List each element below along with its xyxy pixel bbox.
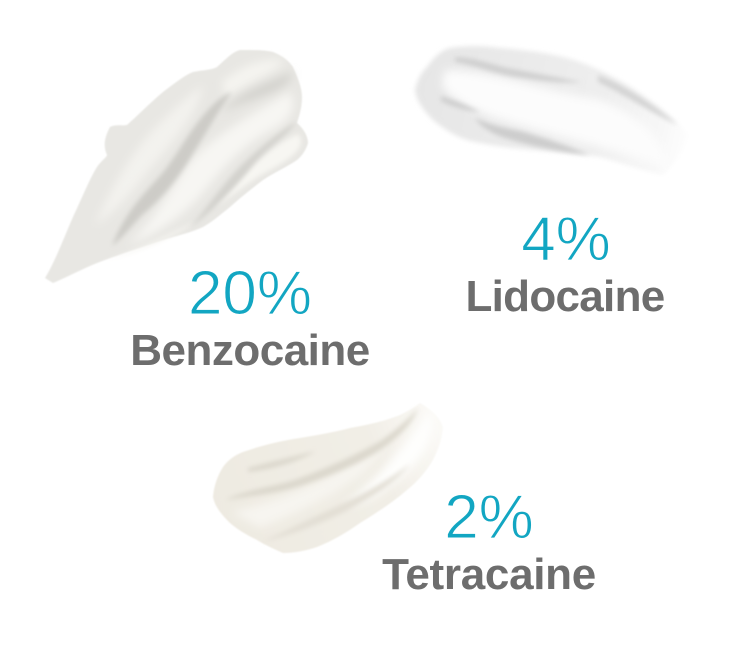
smear: tetracaine — [213, 403, 443, 553]
lobe highlights — [95, 85, 203, 225]
bright band — [345, 410, 433, 505]
upper and lower folds — [455, 57, 582, 83]
bright centre — [442, 70, 670, 170]
name: Tetracaine: Tetracaine — [382, 550, 596, 599]
smear: benzocaine — [45, 50, 308, 283]
shaded folds — [222, 72, 292, 112]
percentage: 4%: 4% — [521, 205, 611, 274]
name: Benzocaine: Benzocaine — [130, 326, 370, 375]
label: 20% Benzocaine — [130, 259, 370, 375]
folds — [225, 408, 418, 500]
name: Lidocaine: Lidocaine — [465, 272, 665, 321]
smear: lidocaine — [415, 46, 687, 175]
label: 2% Tetracaine — [382, 483, 596, 599]
percentage: 2%: 2% — [444, 483, 534, 552]
label: 4% Lidocaine — [465, 205, 665, 321]
percentage: 20%: 20% — [188, 259, 312, 328]
